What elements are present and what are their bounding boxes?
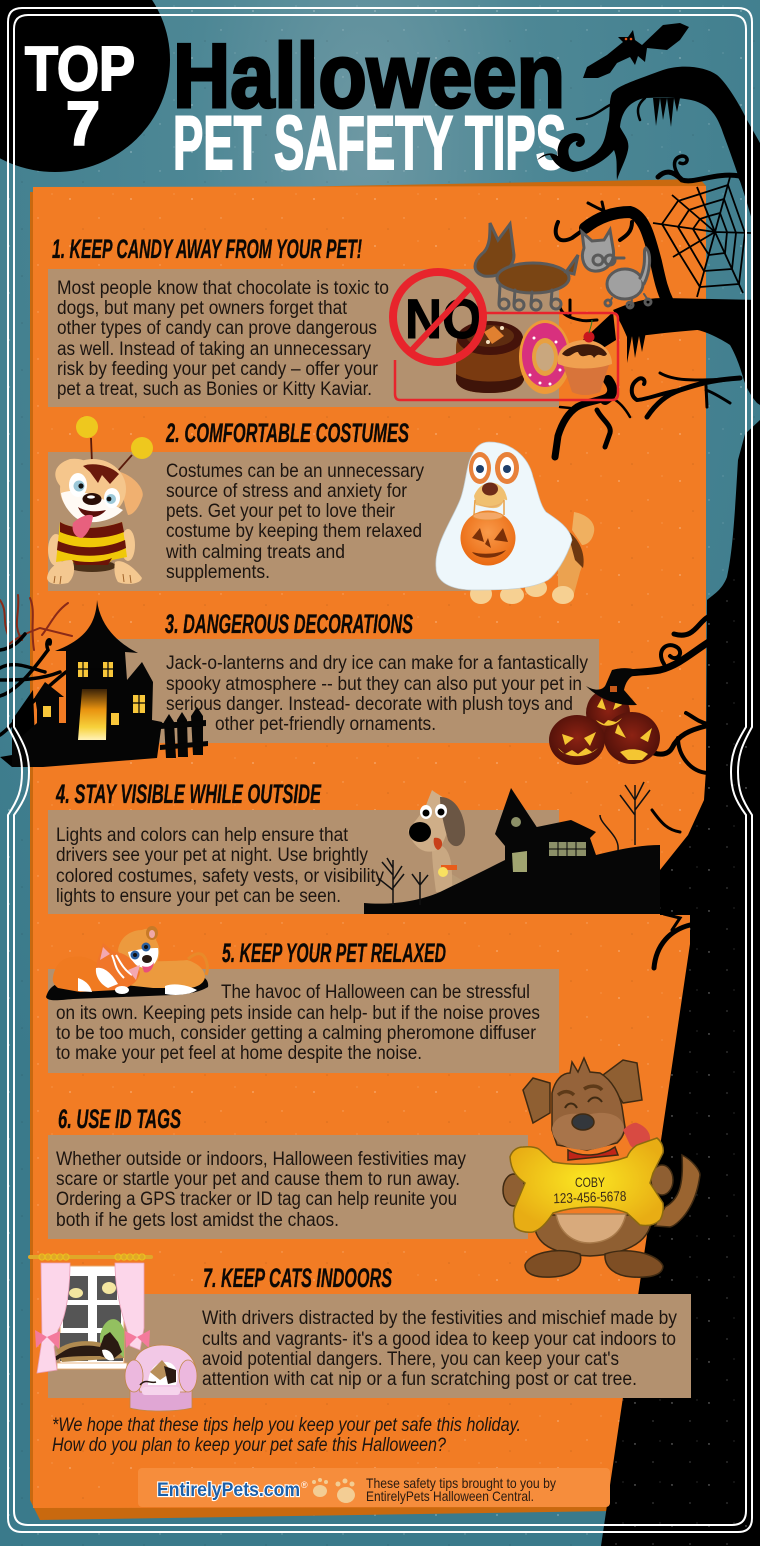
tip 5 body: on its own. Keeping pets inside can help- but if the noise proves xyxy=(56,1003,540,1024)
tip 4 body: colored costumes, safety vests, or visibility xyxy=(56,866,384,887)
tip 4 body xyxy=(56,825,384,907)
witch hat xyxy=(586,668,645,705)
icon: brown dog with id tag xyxy=(503,1058,700,1277)
tip 7 heading: 7. KEEP CATS INDOORS xyxy=(203,1263,392,1293)
tip 5 body: to make your pet feel at home despite the noise. xyxy=(56,1043,422,1064)
tip 6 body: Ordering a GPS tracker or ID tag can help reunite you xyxy=(56,1189,457,1210)
tip 1 body: dogs, but many pet owners forget that xyxy=(57,298,348,319)
tip 2 body: source of stress and anxiety for xyxy=(166,481,408,502)
arms xyxy=(503,1174,525,1206)
lower left branch xyxy=(555,397,607,457)
bone tag xyxy=(510,1138,663,1232)
tip 5: relaxed xyxy=(56,938,540,1064)
panel: orange paper xyxy=(30,179,706,1520)
cat head xyxy=(97,943,140,990)
tip 1 body: risk by feeding your pet candy – offer your xyxy=(57,359,379,380)
footer: entirelypets credit xyxy=(138,1468,610,1507)
closing question xyxy=(52,1415,521,1456)
tip 7 body: attention with cat nip or a fun scratching post or cat tree. xyxy=(202,1369,637,1390)
bare trees xyxy=(378,782,650,905)
tip 7 body: cults and vagrants- it's a good idea to keep your cat indoors to xyxy=(202,1329,676,1350)
tip 1 body: other types of candy can prove dangerous xyxy=(57,318,377,339)
tip 5 body: The havoc of Halloween can be stressful xyxy=(221,982,530,1003)
collar xyxy=(568,1147,618,1160)
logo: EntirelyPets.com xyxy=(157,1480,300,1501)
tip 7 body: With drivers distracted by the festivities and mischief made by xyxy=(202,1308,677,1329)
tip 7: cats indoors xyxy=(202,1263,677,1390)
registered mark: ® xyxy=(301,1480,308,1490)
icon: bat xyxy=(583,23,689,78)
icon: hill and houses xyxy=(364,782,660,914)
icon: window with cat xyxy=(28,1254,153,1373)
body xyxy=(534,1215,652,1256)
donut xyxy=(519,320,571,394)
head xyxy=(552,1058,625,1150)
tip 2 body: Costumes can be an unnecessary xyxy=(166,461,424,482)
tip 1 body: as well. Instead of taking an unnecessary xyxy=(57,339,371,360)
closing question: How do you plan to keep your pet safe this Halloween? xyxy=(52,1435,446,1456)
text boxes xyxy=(48,269,691,1398)
fence xyxy=(160,707,208,758)
tag text: COBY xyxy=(575,1174,605,1190)
badge: top 7 xyxy=(0,0,170,172)
tip 6 body: both if he gets lost amidst the chaos. xyxy=(56,1210,339,1231)
tree: web branch group xyxy=(555,156,760,457)
credit text: EntirelyPets Halloween Central. xyxy=(366,1488,534,1504)
tip 1: candy xyxy=(52,234,389,400)
cake xyxy=(456,321,524,393)
paw prints xyxy=(312,1478,355,1503)
tip 3 body: spooky atmosphere -- but they can also put your pet in xyxy=(166,674,582,695)
icon: red frame xyxy=(395,313,618,400)
credit text xyxy=(366,1475,556,1504)
title: Halloween xyxy=(173,26,565,127)
icon: NO sign xyxy=(393,272,483,362)
closing question: *We hope that these tips help you keep your pet safe this holiday. xyxy=(52,1415,521,1436)
tip 1 body: Most people know that chocolate is toxic to xyxy=(57,278,389,299)
tip 3 body: serious danger. Instead- decorate with plush toys and xyxy=(166,694,573,715)
icon: haunted house xyxy=(12,600,208,767)
ears xyxy=(523,1078,550,1123)
icon: sketched dog and cat xyxy=(475,223,651,310)
paws xyxy=(47,560,74,584)
tree: trunk silhouette xyxy=(601,420,760,1546)
tree: upper arch branch xyxy=(537,67,760,360)
credit text: These safety tips brought to you by xyxy=(366,1475,556,1491)
hind legs and body xyxy=(48,534,64,566)
lower right branches xyxy=(660,373,740,380)
title xyxy=(173,26,566,186)
tip 4 body: drivers see your pet at night. Use brightly xyxy=(56,845,368,866)
tip 3 body: other pet-friendly ornaments. xyxy=(215,714,436,735)
icon: ghost dog xyxy=(436,442,594,604)
dog head xyxy=(118,929,159,972)
tip 6: id tags xyxy=(56,1104,466,1231)
tag number: 123-456-5678 xyxy=(553,1188,627,1206)
tip 6 heading: 6. USE ID TAGS xyxy=(58,1104,181,1134)
tip 7 body xyxy=(202,1308,677,1390)
icon: cat on armchair xyxy=(125,1345,197,1411)
tip 7 body: avoid potential dangers. There, you can keep your cat's xyxy=(202,1349,619,1370)
tip 4 body: Lights and colors can help ensure that xyxy=(56,825,349,846)
tip 2 body xyxy=(165,461,424,583)
tip 2: costumes xyxy=(165,418,424,583)
tip 3 body: Jack-o-lanterns and dry ice can make for a fantastically xyxy=(166,653,588,674)
ears xyxy=(55,459,85,488)
tip 5 body xyxy=(56,982,540,1064)
muffin xyxy=(558,320,612,395)
tip 1 body xyxy=(57,278,389,400)
icon: bee puppy xyxy=(47,416,153,584)
tongue xyxy=(623,1123,650,1152)
icon: standing dog xyxy=(408,790,470,905)
head xyxy=(60,459,126,519)
cat body xyxy=(53,957,117,992)
icon: NO sign: NO xyxy=(405,287,482,350)
tip 5 heading: 5. KEEP YOUR PET RELAXED xyxy=(222,938,446,968)
dog body xyxy=(125,960,205,988)
tip 4: visibility xyxy=(55,779,384,907)
icon: jack-o-lanterns xyxy=(549,668,660,765)
tip 6 body xyxy=(56,1149,466,1231)
tip 2 body: costume by keeping them relaxed xyxy=(166,521,422,542)
tail xyxy=(655,1155,700,1227)
tip 3 heading: 3. DANGEROUS DECORATIONS xyxy=(165,609,413,639)
spider web xyxy=(653,177,752,297)
tip 1 heading: 1. KEEP CANDY AWAY FROM YOUR PET! xyxy=(52,234,362,264)
icon: sweets xyxy=(456,320,612,395)
tip 2 heading: 2. COMFORTABLE COSTUMES xyxy=(165,418,409,448)
tip 6 body: scare or startle your pet and cause them to run away. xyxy=(56,1169,460,1190)
tip 1 body: pet a treat, such as Bonies or Kitty Kaviar. xyxy=(57,379,372,400)
sweater xyxy=(56,522,127,564)
icon: dog and cat cuddling xyxy=(46,926,208,1000)
tip 2 body: with calming treats and xyxy=(165,542,345,563)
tip 2 body: supplements. xyxy=(166,562,270,583)
tip 4 body: lights to ensure your pet can be seen. xyxy=(56,886,341,907)
tip 3 body xyxy=(166,653,588,735)
badge: top 7: 7 xyxy=(66,90,100,159)
feet xyxy=(525,1251,581,1277)
tip 5 body: to be too much, consider getting a calming pheromone diffuser xyxy=(56,1023,537,1044)
tip 2 body: pets. Get your pet to love their xyxy=(166,501,396,522)
tip 3: decorations xyxy=(165,609,588,735)
tree: middle branches xyxy=(630,617,712,968)
tip 4 heading: 4. STAY VISIBLE WHILE OUTSIDE xyxy=(55,779,322,809)
icon: left dead tree xyxy=(0,595,72,767)
badge: top 7: TOP xyxy=(25,35,135,104)
tip 6 body: Whether outside or indoors, Halloween festivities may xyxy=(56,1149,466,1170)
